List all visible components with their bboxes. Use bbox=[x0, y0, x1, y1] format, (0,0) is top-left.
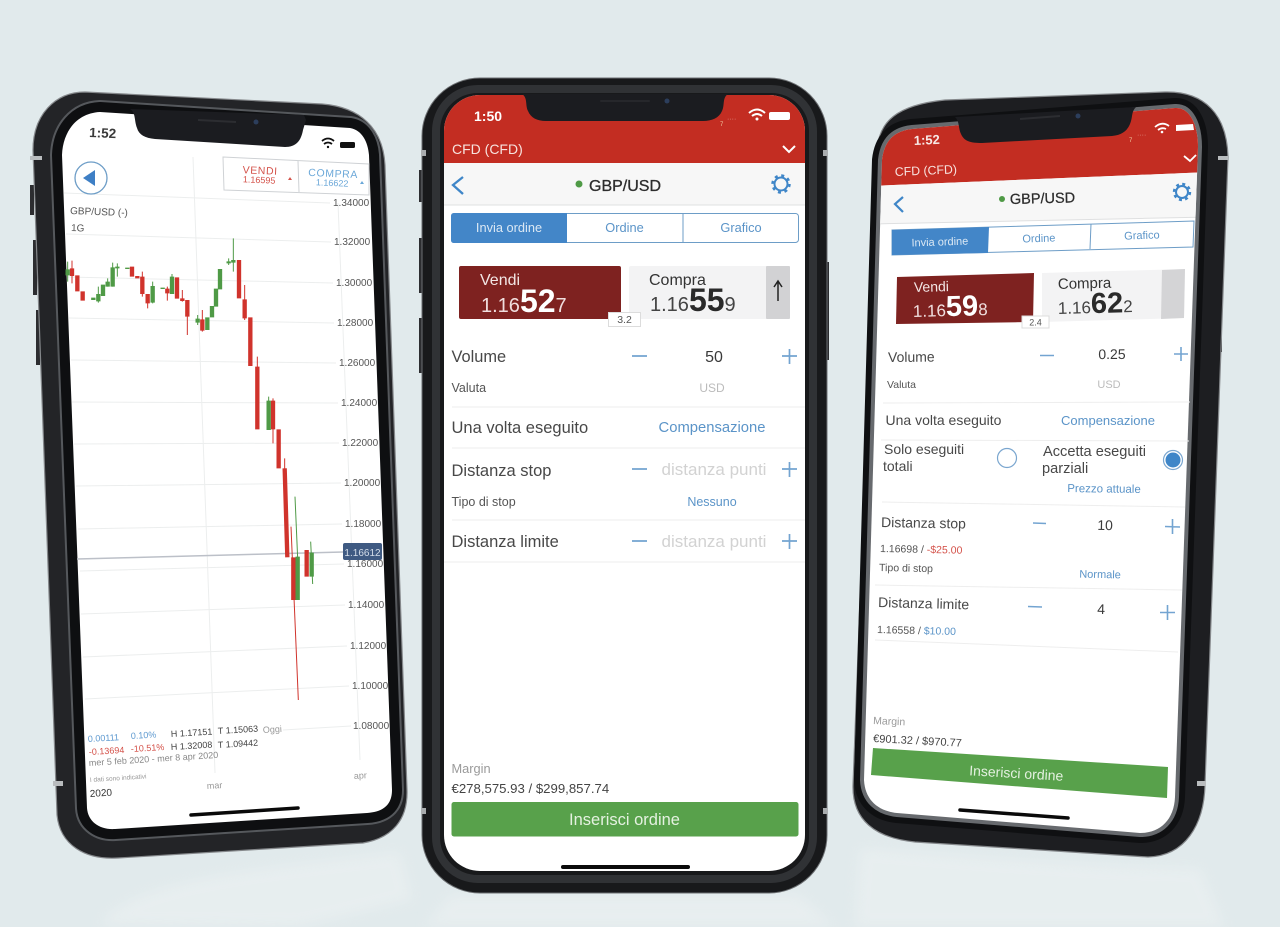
instrument label: GBP/USD (-) bbox=[70, 206, 128, 219]
order form right: Compensazione bbox=[1061, 413, 1155, 428]
instrument label: 1G bbox=[71, 223, 85, 234]
order form center bbox=[444, 348, 805, 562]
phone: left chart screen bbox=[30, 92, 407, 858]
margin right: €901.32 / $970.77 bbox=[873, 733, 962, 750]
account title right: CFD (CFD) bbox=[895, 162, 957, 179]
submit button right bbox=[871, 748, 1168, 798]
candlestick chart bbox=[68, 238, 313, 700]
margin right: Margin bbox=[873, 715, 906, 728]
price axis labels: 1.34000 bbox=[333, 198, 370, 209]
side buttons center phone bbox=[419, 170, 829, 373]
buy price button center: Compra bbox=[649, 272, 706, 289]
status bar center: 7 bbox=[720, 122, 724, 128]
submit button center: Inserisci ordine bbox=[569, 811, 680, 829]
order form center: 50 bbox=[705, 349, 723, 366]
phone body left bbox=[33, 92, 407, 858]
buy price button center: 1.16559 bbox=[650, 282, 736, 318]
segmented tabs center: Ordine bbox=[605, 220, 644, 235]
price axis labels: 1.24000 bbox=[341, 398, 378, 409]
margin right bbox=[873, 715, 962, 750]
side buttons right phone bbox=[869, 260, 1222, 380]
back button bbox=[75, 162, 107, 194]
screen right bbox=[864, 108, 1198, 833]
statistics block: -0.13694 bbox=[89, 745, 125, 757]
sell and buy box bbox=[223, 157, 369, 195]
segmented tabs center: Grafico bbox=[720, 220, 762, 235]
order form right: Volume bbox=[888, 349, 935, 365]
statistics block: I dati sono indicativi bbox=[90, 773, 147, 784]
notch center bbox=[522, 94, 728, 121]
chart grid bbox=[64, 157, 360, 773]
price axis labels: 1.10000 bbox=[352, 681, 389, 692]
price axis labels: 1.32000 bbox=[334, 237, 371, 248]
order form center: Una volta eseguito bbox=[452, 419, 588, 437]
margin center: €278,575.93 / $299,857.74 bbox=[452, 781, 609, 796]
screen center bbox=[444, 95, 805, 871]
segmented tabs center bbox=[451, 213, 798, 243]
buy price button right bbox=[1042, 269, 1185, 322]
segmented tabs right: Ordine bbox=[1022, 232, 1056, 246]
sell price button right: Vendi bbox=[914, 278, 949, 295]
status bar right: 7 bbox=[1129, 138, 1133, 144]
order form right: parziali bbox=[1042, 461, 1088, 477]
statistics block bbox=[88, 724, 367, 800]
status bar center: 1:50 bbox=[474, 108, 502, 124]
order form right: Prezzo attuale bbox=[1067, 483, 1141, 496]
order form center: Tipo di stop bbox=[452, 495, 516, 509]
order form center: Volume bbox=[452, 348, 506, 366]
sell price button right: 1.16598 bbox=[912, 290, 988, 324]
statistics block: 2020 bbox=[89, 788, 113, 800]
price axis labels: 1.08000 bbox=[353, 721, 390, 732]
statistics block: 0.00111 bbox=[88, 732, 119, 744]
price axis labels: 1.14000 bbox=[348, 600, 385, 611]
statistics block: mar bbox=[206, 780, 223, 791]
statistics block: Oggi bbox=[263, 724, 282, 735]
sell and buy box: 1.16595 bbox=[243, 174, 276, 186]
current price line bbox=[77, 552, 343, 559]
order form right: totali bbox=[883, 458, 913, 474]
statistics block: H 1.32008 bbox=[171, 740, 213, 752]
order form right: 1.16558 / $10.00 bbox=[877, 624, 956, 638]
order form right: USD bbox=[1097, 379, 1121, 391]
phone body right bbox=[853, 92, 1228, 857]
sell price button right bbox=[896, 273, 1034, 324]
order form right: Tipo di stop bbox=[879, 562, 933, 575]
price axis labels: 1.12000 bbox=[350, 641, 387, 652]
home indicator center bbox=[561, 865, 690, 869]
price axis labels: 1.20000 bbox=[344, 478, 381, 489]
order form right: Accetta eseguiti bbox=[1043, 444, 1146, 460]
order form center: Compensazione bbox=[659, 420, 765, 436]
home indicator left bbox=[191, 808, 298, 815]
sell and buy box: VENDI bbox=[242, 164, 278, 178]
navigation bar right bbox=[895, 184, 1190, 212]
order form center: Valuta bbox=[452, 381, 486, 395]
notch left bbox=[130, 109, 306, 147]
spread badge right: 2.4 bbox=[1029, 318, 1042, 328]
order form right: Distanza stop bbox=[881, 514, 966, 531]
side buttons left phone bbox=[30, 185, 387, 365]
order form right: Una volta eseguito bbox=[886, 412, 1002, 428]
price axis labels: 1.22000 bbox=[342, 438, 379, 449]
navigation bar center bbox=[453, 176, 790, 195]
segmented tabs right bbox=[892, 221, 1194, 255]
buy price button right: Compra bbox=[1058, 275, 1112, 293]
submit button right: Inserisci ordine bbox=[969, 762, 1064, 784]
order form right bbox=[875, 346, 1190, 652]
phone body center bbox=[422, 78, 827, 893]
order form right: Distanza limite bbox=[878, 594, 970, 612]
phone: right order screen bbox=[853, 92, 1228, 857]
sell and buy box: 1.16622 bbox=[316, 177, 349, 189]
instrument label bbox=[70, 206, 128, 234]
statistics block: T 1.15063 bbox=[218, 724, 258, 736]
status bar left: 1:52 bbox=[89, 125, 117, 141]
account title right bbox=[895, 155, 1196, 179]
order form center: USD bbox=[699, 381, 725, 395]
sell and buy box: COMPRA bbox=[308, 167, 358, 181]
statistics block: 0.10% bbox=[131, 729, 157, 741]
status bar left bbox=[89, 125, 355, 148]
status bar right bbox=[913, 124, 1194, 148]
spread badge center bbox=[608, 312, 640, 326]
red header right bbox=[880, 108, 1198, 224]
order form right: 1.16698 / -$25.00 bbox=[880, 543, 963, 557]
order form right: 0.25 bbox=[1098, 346, 1126, 362]
price axis labels: 1.28000 bbox=[337, 318, 374, 329]
segmented tabs right: Grafico bbox=[1124, 229, 1160, 243]
order form right: Solo eseguiti bbox=[884, 441, 964, 457]
order form center: distanza punti bbox=[662, 532, 766, 551]
sell price button center: Vendi bbox=[480, 272, 520, 289]
order form center: Nessuno bbox=[687, 495, 737, 509]
segmented tabs center: Invia ordine bbox=[476, 220, 542, 235]
sell price button center bbox=[459, 266, 621, 319]
order form right: Normale bbox=[1079, 569, 1121, 581]
navigation bar center: GBP/USD bbox=[589, 178, 661, 195]
current price tag bbox=[343, 543, 382, 560]
screen left bbox=[62, 112, 392, 829]
price axis labels bbox=[333, 198, 390, 732]
submit button center bbox=[452, 802, 798, 836]
margin center: Margin bbox=[452, 761, 491, 776]
notch right bbox=[955, 107, 1136, 143]
order form center: Distanza stop bbox=[452, 462, 551, 480]
statistics block: H 1.17151 bbox=[171, 727, 213, 739]
price axis labels: 1.26000 bbox=[339, 358, 376, 369]
buy price button center bbox=[629, 266, 790, 319]
order form right: Valuta bbox=[887, 379, 916, 391]
home indicator right bbox=[960, 810, 1068, 818]
spread badge right bbox=[1022, 316, 1049, 328]
spread badge center: 3.2 bbox=[617, 314, 632, 326]
sell price button center: 1.16527 bbox=[481, 283, 567, 319]
reflections under the phones bbox=[100, 848, 1225, 927]
order form center: Distanza limite bbox=[452, 533, 559, 551]
account title center: CFD (CFD) bbox=[452, 141, 523, 157]
navigation bar right: GBP/USD bbox=[1010, 190, 1075, 208]
order form right: 10 bbox=[1097, 517, 1113, 533]
status bar center: ···· bbox=[727, 116, 736, 123]
current price tag: 1.16612 bbox=[344, 548, 381, 559]
red header center bbox=[444, 95, 805, 205]
status bar center bbox=[474, 108, 790, 128]
statistics block: -10.51% bbox=[131, 742, 165, 754]
statistics block: mer 5 feb 2020 - mer 8 apr 2020 bbox=[88, 750, 218, 768]
price axis labels: 1.30000 bbox=[336, 278, 373, 289]
buy price button right: 1.16622 bbox=[1057, 287, 1133, 321]
margin center bbox=[452, 761, 609, 796]
order form right: 4 bbox=[1097, 601, 1105, 617]
segmented tabs right: Invia ordine bbox=[911, 236, 969, 249]
price axis labels: 1.18000 bbox=[345, 519, 382, 530]
account title center bbox=[452, 141, 795, 157]
order form center: distanza punti bbox=[662, 460, 766, 479]
price axis labels: 1.16000 bbox=[347, 559, 384, 570]
statistics block: T 1.09442 bbox=[218, 738, 258, 750]
status bar right: 1:52 bbox=[913, 132, 940, 148]
phone: center order screen bbox=[419, 78, 829, 893]
statistics block: apr bbox=[353, 770, 367, 781]
status bar right: ···· bbox=[1137, 132, 1146, 139]
